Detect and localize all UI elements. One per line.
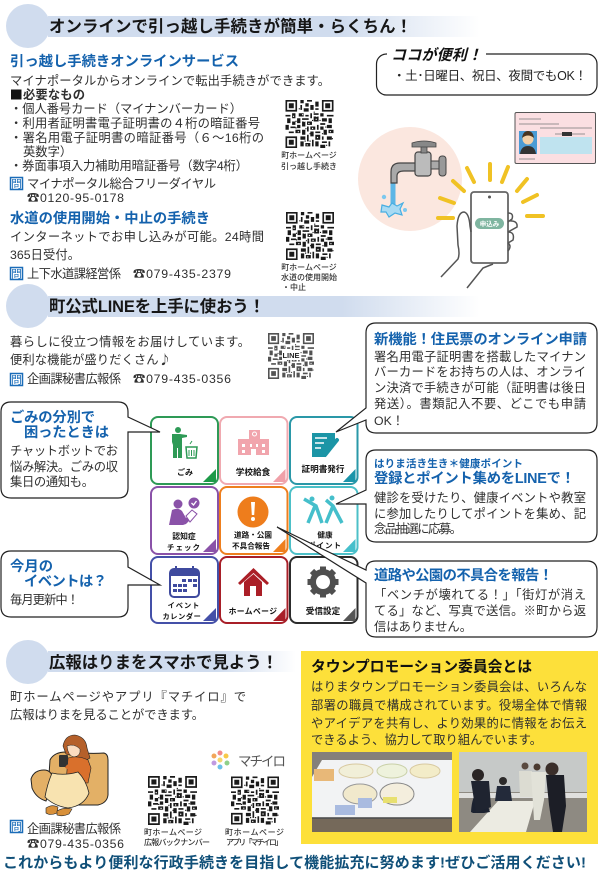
tile: notification settings: 受信設定	[306, 605, 341, 616]
callout: new resident card feature: 発送）。書類記入不要、どこでも申請	[374, 396, 586, 411]
tile: health points	[290, 487, 358, 554]
photo: workshop table	[312, 752, 452, 832]
tile: road and park report	[220, 487, 288, 554]
text block: required items: 英数字）	[23, 144, 72, 159]
text block: water service description	[10, 229, 264, 262]
icon: Machiiro logo	[212, 750, 286, 770]
contact: public relations (LINE): 問	[11, 374, 22, 386]
callout: health points: に参加したりしてポイントを集め、記	[374, 506, 586, 521]
QR code: water service: ・中止	[282, 282, 306, 292]
contact: water department: ☎079-435-2379	[133, 267, 231, 281]
text block: committee description: 部署の職員で構成されています。役場全体で情報	[311, 698, 587, 712]
tile: dementia check: チェック	[167, 542, 201, 552]
heading: LINE: 町公式LINEを上手に使おう！	[49, 297, 265, 316]
contact: water department	[10, 267, 231, 281]
callout: monthly events: イベントは？	[24, 574, 107, 590]
contact: my number portal dial: 問	[11, 178, 22, 190]
panel: town promotion committee	[301, 651, 598, 844]
QR code: moving procedure: 引っ越し手続き	[281, 161, 337, 171]
callout: monthly events: 今月の	[10, 557, 53, 575]
QR code: LINE	[268, 333, 314, 379]
tile: event calendar	[151, 557, 218, 623]
icon: my number card	[515, 112, 596, 164]
panel: online moving service	[10, 52, 337, 205]
photo: committee members around a table	[459, 752, 587, 832]
heading: committee: タウンプロモーション委員会とは	[311, 658, 532, 676]
callout: road and park defects	[277, 527, 597, 637]
callout: convenient points	[376, 46, 597, 95]
callout: garbage: チャットボットでお	[10, 444, 118, 458]
QR code: newsletter back numbers	[144, 776, 210, 847]
contact: public relations (LINE): ☎079-435-0356	[133, 372, 231, 386]
callout: monthly events: 毎月更新中！	[10, 592, 79, 607]
tile: notification settings	[290, 557, 358, 623]
text block: committee description: やアイデアを共有し、より効果的に情報をお伝え	[311, 716, 587, 730]
heading: water service: 水道の使用開始・中止の手続き	[10, 209, 210, 227]
contact: public relations (newsletter): ☎079-435-0356	[27, 837, 124, 851]
text block: water service description: 365日受付。	[10, 248, 80, 262]
text block: required items: ・署名用電子証明書の暗証番号（６～16桁の	[10, 130, 264, 145]
heading: moving service: 引っ越し手続きオンラインサービス	[10, 52, 239, 70]
tile: certificate: 証明書発行	[302, 463, 345, 474]
callout: garbage: 悩み解決。ごみの収	[10, 459, 118, 474]
tile: event calendar: カレンダー	[163, 612, 201, 621]
callout: health points: 念品抽選に応募。	[374, 522, 462, 536]
contact: my number portal dial	[10, 176, 216, 205]
text block: required items: ・利用者証明書電子証明書の４桁の暗証番号	[10, 116, 260, 130]
QR code: LINE: LINE	[282, 351, 300, 360]
callout: new resident card feature	[336, 323, 597, 433]
icon: smartphone in hand: 申込み	[480, 219, 500, 228]
callout: garbage: 困ったときは	[24, 424, 109, 441]
tile: garbage: ごみ	[177, 467, 193, 477]
footer message: これからもより便利な行政手続きを目指して機能拡充に努めます!ぜひご活用ください!	[3, 854, 586, 872]
heading: online moving procedures	[6, 4, 480, 48]
tile: road and park report: 道路・公園	[234, 530, 272, 540]
callout: health points: はりま活き生き＊健康ポイント	[374, 457, 523, 470]
icon: faucet with water	[358, 127, 462, 231]
QR code: Machiiro app	[225, 776, 284, 847]
heading: online moving procedures: オンラインで引っ越し手続きが簡単・らくちん！	[49, 17, 412, 36]
callout: convenient points: ココが便利！	[391, 47, 482, 64]
text block: newsletter intro: 町ホームページやアプリ『マチイロ』で	[10, 690, 246, 704]
QR code: moving procedure	[281, 100, 337, 171]
callout: new resident card feature: ン決済で手続きが可能（証明書は後日	[374, 380, 586, 395]
tile: homepage	[220, 557, 288, 623]
callout: road and park defects: 「ベンチが壊れてる！」「街灯が消え	[374, 587, 586, 602]
panel: water service	[10, 209, 337, 292]
QR code: moving procedure: 町ホームページ	[281, 151, 337, 160]
text block: required items: ・券面事項入力補助用暗証番号（数字4桁）	[10, 158, 248, 173]
QR code: water service: 町ホームページ	[281, 263, 337, 272]
text block: newsletter intro: 広報はりまを見ることができます。	[10, 707, 204, 722]
tile: event calendar: イベント	[168, 601, 200, 610]
heading: read the newsletter on smartphone: 広報はりまをスマホで見よう！	[49, 654, 278, 672]
callout: garbage: 集日の通知も。	[10, 474, 94, 489]
text block: committee description: できるよう、協力して取り組んでいます。	[311, 732, 542, 747]
text block: newsletter intro	[10, 690, 246, 722]
tile: certificate	[290, 417, 358, 484]
contact: public relations (newsletter)	[10, 820, 124, 851]
tile: school lunch	[220, 417, 288, 484]
heading: read the newsletter on smartphone	[6, 640, 296, 684]
tile: dementia check: 認知症	[172, 531, 196, 541]
QR code: water service	[281, 212, 337, 292]
contact: public relations (newsletter): 問	[11, 822, 22, 834]
callout: health points	[336, 450, 597, 542]
callout: convenient points: ・土･日曜日、祝日、夜間でもOK！	[393, 69, 587, 83]
tile: health points: 健康	[317, 530, 333, 540]
tile: school lunch: 学校給食	[236, 466, 271, 477]
callout: road and park defects: 信はありません。	[374, 619, 472, 634]
text block: committee description: はりまタウンプロモーション委員会は、いろんな	[311, 680, 587, 694]
QR code: water service: 水道の使用開始	[281, 272, 337, 282]
text block: moving service intro: マイナポータルからオンラインで転出手続きができます。	[10, 73, 330, 88]
tile: road and park report: 不具合報告	[232, 540, 270, 550]
tile: homepage: ホームページ	[229, 607, 277, 616]
callout: monthly events	[1, 551, 160, 617]
callout: new resident card feature: 新機能！住民票のオンライン申請	[374, 330, 587, 348]
text block: LINE intro: 暮らしに役立つ情報をお届けしています。	[10, 334, 250, 349]
tile: health points: ポイント	[308, 541, 342, 550]
QR code: Machiiro app: アプリ「マチイロ」	[226, 838, 283, 847]
text block: required items: 必要なもの	[23, 87, 85, 102]
icon: Machiiro logo: マチイロ	[238, 754, 286, 769]
icon: smartphone in hand	[438, 164, 543, 288]
panel: LINE menu tiles	[151, 417, 358, 623]
contact: my number portal dial: ☎0120-95-0178	[27, 191, 124, 205]
callout: health points: 登録とポイント集めをLINEで！	[374, 469, 575, 487]
contact: public relations (newsletter): 企画課秘書広報係	[27, 822, 122, 836]
callout: garbage: ごみの分別で	[10, 408, 95, 426]
contact: water department: 上下水道課経営係	[27, 267, 122, 281]
callout: road and park defects: 道路や公園の不具合を報告！	[374, 566, 553, 584]
tile: garbage	[151, 417, 218, 484]
text block: LINE intro: 便利な機能が盛りだくさん♪	[10, 350, 171, 368]
QR code: newsletter back numbers: 町ホームページ	[144, 828, 202, 837]
text block: required items	[10, 87, 264, 173]
text block: committee description	[311, 680, 587, 747]
contact: my number portal dial: マイナポータル総合フリーダイヤル	[27, 176, 216, 191]
heading: LINE	[6, 284, 480, 328]
callout: garbage	[1, 402, 160, 498]
contact: public relations (LINE)	[10, 372, 231, 386]
icon: woman reading on a sofa	[31, 735, 108, 816]
callout: new resident card feature: バーカードをお持ちの人は、オンライ	[374, 364, 586, 379]
text block: required items: ・個人番号カード（マイナンバーカード）	[10, 102, 242, 116]
QR code: Machiiro app: 町ホームページ	[225, 828, 284, 837]
tile: dementia check	[151, 487, 218, 554]
contact: public relations (LINE): 企画課秘書広報係	[27, 372, 122, 386]
text block: water service description: インターネットでお申し込みが可能。24時間	[10, 229, 264, 244]
text block: LINE intro	[10, 334, 250, 368]
callout: health points: 健診を受けたり、健康イベントや教室	[374, 490, 586, 505]
QR code: newsletter back numbers: 広報バックナンバー	[144, 837, 210, 847]
contact: water department: 問	[11, 268, 22, 280]
callout: new resident card feature: OK！	[374, 414, 404, 428]
callout: new resident card feature: 署名用電子証明書を搭載したマイナン	[374, 349, 586, 364]
callout: road and park defects: てる」など、写真で送信。※町から返	[374, 603, 586, 618]
